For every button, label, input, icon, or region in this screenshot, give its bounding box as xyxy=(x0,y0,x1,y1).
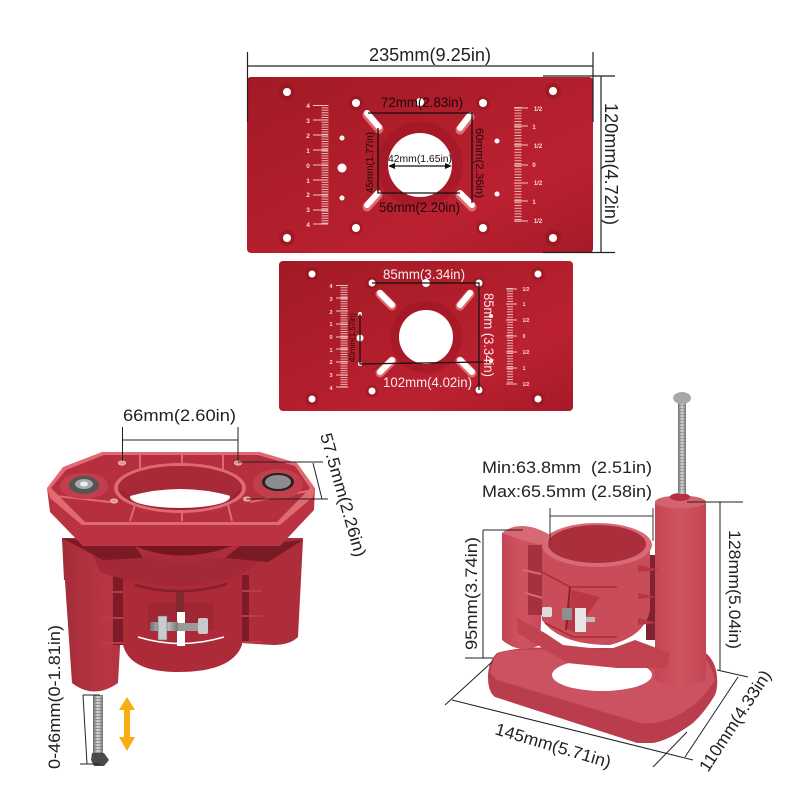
dimension: Min and Max bore xyxy=(482,459,653,541)
inner dimension labels: 45mm(1.77in) xyxy=(365,132,376,193)
right ruler: 0 xyxy=(523,334,526,340)
right ruler: 1/2 xyxy=(534,107,543,113)
mounting holes xyxy=(279,83,561,246)
left ruler: 3 xyxy=(329,297,333,303)
dimension: plate height 120mm xyxy=(543,76,621,253)
left ruler: 0 xyxy=(329,335,333,341)
inner dimension labels xyxy=(365,95,485,215)
right bearing xyxy=(253,469,303,499)
right ruler: 1/2 xyxy=(523,318,530,324)
base plate xyxy=(488,648,717,743)
left ruler: 3 xyxy=(306,207,310,214)
clamp xyxy=(542,587,600,633)
central sleeve xyxy=(542,523,652,645)
centre opening xyxy=(390,301,462,373)
right ruler: 1/2 xyxy=(534,181,543,187)
plate body xyxy=(247,77,593,253)
right ribs xyxy=(638,565,660,625)
right ruler xyxy=(514,107,543,225)
right ruler: 1/2 xyxy=(534,219,543,225)
arrow: 42mm xyxy=(388,163,452,169)
inner dimension labels: 72mm(2.83in) xyxy=(381,95,463,110)
left ruler: 4 xyxy=(306,222,310,229)
right ruler: 1/2 xyxy=(523,350,530,356)
angled slots xyxy=(380,293,472,373)
dimension: 95mm xyxy=(462,530,523,658)
left ruler: 2 xyxy=(306,133,310,140)
dimension: Min and Max bore: Max:65.5mm (2.58in) xyxy=(482,483,652,501)
inner dimension lines xyxy=(368,113,472,203)
dimension: 0-46mm xyxy=(45,625,100,769)
dimension: 110mm xyxy=(653,667,775,775)
dimension: 66mm xyxy=(122,406,238,461)
bolt xyxy=(673,392,691,494)
dimension: 57.5mm: 57.5mm(2.26in) xyxy=(316,431,370,559)
left ruler xyxy=(329,284,348,392)
left post xyxy=(62,538,160,692)
dimension: 145mm xyxy=(445,662,693,772)
right ruler: 1 xyxy=(523,366,526,372)
sleeve window slot xyxy=(135,584,227,591)
screw holes xyxy=(110,461,250,503)
dimension: plate width 235mm: 235mm(9.25in) xyxy=(369,45,491,65)
reinforcing ribs xyxy=(56,453,308,521)
right ruler: 1 xyxy=(532,200,536,206)
panel: right product, router base upright xyxy=(488,392,717,743)
left ruler: 3 xyxy=(329,373,333,379)
depth bolt xyxy=(91,695,109,766)
sleeve slot lines xyxy=(542,572,617,637)
base opening xyxy=(552,659,652,691)
inner dimension labels: 102mm(4.02in) xyxy=(383,375,472,390)
crescent under flange xyxy=(92,552,272,586)
right ruler: 1 xyxy=(532,125,536,131)
tall post xyxy=(655,493,706,688)
left ruler: 3 xyxy=(306,118,310,125)
inner dimension labels: 85mm (3.34in) xyxy=(481,293,496,377)
central ring xyxy=(114,463,246,513)
angled slots xyxy=(367,113,472,207)
panel: large router plate xyxy=(247,77,593,253)
dark band under flange xyxy=(62,538,303,562)
dimension: 95mm: 95mm(3.74in) xyxy=(462,537,481,650)
top flange face xyxy=(47,452,315,525)
dimension: 66mm: 66mm(2.60in) xyxy=(123,406,236,425)
panel: small router plate xyxy=(279,261,573,411)
top flange side xyxy=(47,488,315,546)
left ruler: 1 xyxy=(306,148,310,155)
inner dimension labels xyxy=(348,267,496,390)
dimension: 0-46mm: 0-46mm(0-1.81in) xyxy=(45,625,64,769)
body backing xyxy=(62,538,303,580)
inner dimension labels: 60mm(2.36in) xyxy=(473,128,485,198)
left ruler: 1 xyxy=(329,348,333,354)
central sleeve xyxy=(123,568,242,672)
left ruler xyxy=(306,103,328,229)
arrow: adjust up and down xyxy=(119,697,135,751)
inner dimension labels: 40mm(1.57in) xyxy=(348,313,357,362)
right ruler: 1/2 xyxy=(523,382,530,388)
dimension: 57.5mm xyxy=(238,431,370,559)
left ruler: 4 xyxy=(306,103,310,110)
right post xyxy=(200,540,303,645)
left ruler: 2 xyxy=(329,310,333,316)
sleeve white slit xyxy=(138,637,224,644)
dimension: 110mm: 110mm(4.33in) xyxy=(695,667,775,775)
left ruler: 2 xyxy=(306,192,310,199)
left ruler: 1 xyxy=(306,178,310,185)
right ruler: 1/2 xyxy=(534,144,543,150)
left bearing xyxy=(60,473,108,499)
mounting holes xyxy=(305,267,545,406)
centre opening xyxy=(377,122,463,208)
ribs and dark gaps xyxy=(523,545,655,640)
dimension: 145mm: 145mm(5.71in) xyxy=(493,720,613,772)
left ruler: 4 xyxy=(329,284,333,290)
right ruler: 0 xyxy=(532,163,536,169)
dimension: 128mm: 128mm(5.04in) xyxy=(725,530,744,649)
dimension: plate height 120mm: 120mm(4.72in) xyxy=(601,103,621,225)
inner dimension labels: 56mm(2.20in) xyxy=(379,200,460,215)
inner dimension labels: 85mm(3.34in) xyxy=(383,267,465,282)
right ruler xyxy=(506,287,530,388)
base top face xyxy=(490,649,715,723)
clamp xyxy=(148,592,214,646)
lower web xyxy=(517,618,670,668)
right ruler: 1/2 xyxy=(523,287,530,293)
plate body xyxy=(279,261,573,411)
short post xyxy=(502,526,550,649)
dimension: Min and Max bore: Min:63.8mm (2.51in) xyxy=(482,459,652,477)
left ruler: 2 xyxy=(329,360,333,366)
right ruler: 1 xyxy=(523,302,526,308)
inner dimension labels: 42mm(1.65in) xyxy=(388,153,452,165)
dimension: plate width 235mm xyxy=(247,45,593,122)
dimension: 128mm xyxy=(687,502,748,677)
left ruler: 0 xyxy=(306,163,310,170)
inner dimension lines xyxy=(360,283,483,390)
ribs xyxy=(113,575,249,645)
panel: left product, router base upside down xyxy=(47,452,315,766)
left ruler: 4 xyxy=(329,386,333,392)
left ruler: 1 xyxy=(329,322,333,328)
